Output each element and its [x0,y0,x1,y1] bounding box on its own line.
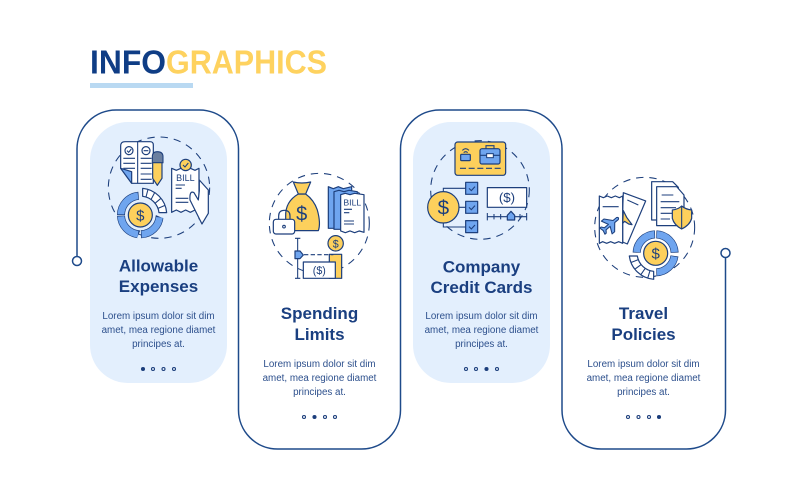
card 1 heading: Expenses [119,277,198,296]
icon: cash bill: ($) [499,190,515,205]
card 1 body text: amet, mea regione diamet [102,325,216,336]
icon: cash and limit marker: ($) [313,265,326,277]
icon: credit card [455,142,506,175]
icon: travel policies [595,177,695,279]
icon: coin with ring: $ [651,246,660,263]
title: INFO [90,44,166,82]
icon: stacked bills: BILL [343,198,361,208]
icon: company credit cards [428,141,529,239]
icon: spending limits [269,173,369,278]
icon: hand [190,180,208,224]
connecting outline [72,110,730,449]
panel: blue background card 3 [413,122,550,383]
card 2 body text: principes at. [293,387,346,398]
title underline [90,83,193,88]
card 4 pagination dots [626,416,660,418]
icon: pencil [152,152,163,185]
card 3 heading: Credit Cards [430,278,533,297]
card 2 body text: Lorem ipsum dolor sit dim [263,359,376,370]
card 2 heading: Limits [294,325,345,344]
card 3 pagination dots [464,368,498,370]
title: GRAPHICS [166,44,327,82]
icon: coin with ring: $ [136,207,145,224]
card 3 body text: principes at. [455,339,508,350]
icon: money bag: $ [296,203,307,225]
panel: blue background card 1 [90,122,227,383]
icon: padlock [273,210,295,234]
icon: slider [487,211,527,220]
icon: documents with shield [652,182,692,229]
card 3 body text: amet, mea regione diamet [425,325,539,336]
card 1 body text: principes at. [132,339,185,350]
card 1 body text: Lorem ipsum dolor sit dim [102,311,215,322]
card 4 body text: principes at. [617,387,670,398]
card 1 pagination dots [142,368,176,370]
card 4 body text: amet, mea regione diamet [587,373,701,384]
card 1 heading: Allowable [119,256,198,276]
icon: coin: $ [333,238,339,250]
card 2 heading: Spending [281,304,358,323]
card 4 heading: Travel [619,304,668,323]
icon: allowable expenses [108,137,210,238]
card 3 body text: Lorem ipsum dolor sit dim [425,311,538,322]
card 2 body text: amet, mea regione diamet [263,373,377,384]
icon: plane tickets [597,193,646,244]
icon: checklist document [121,142,153,183]
card 4 body text: Lorem ipsum dolor sit dim [587,359,700,370]
card 2 pagination dots [302,416,336,418]
icon: bill: BILL [176,173,195,183]
icon: coin with checklist: $ [438,197,450,220]
card 3 heading: Company [443,258,521,276]
card 4 heading: Policies [611,325,676,344]
